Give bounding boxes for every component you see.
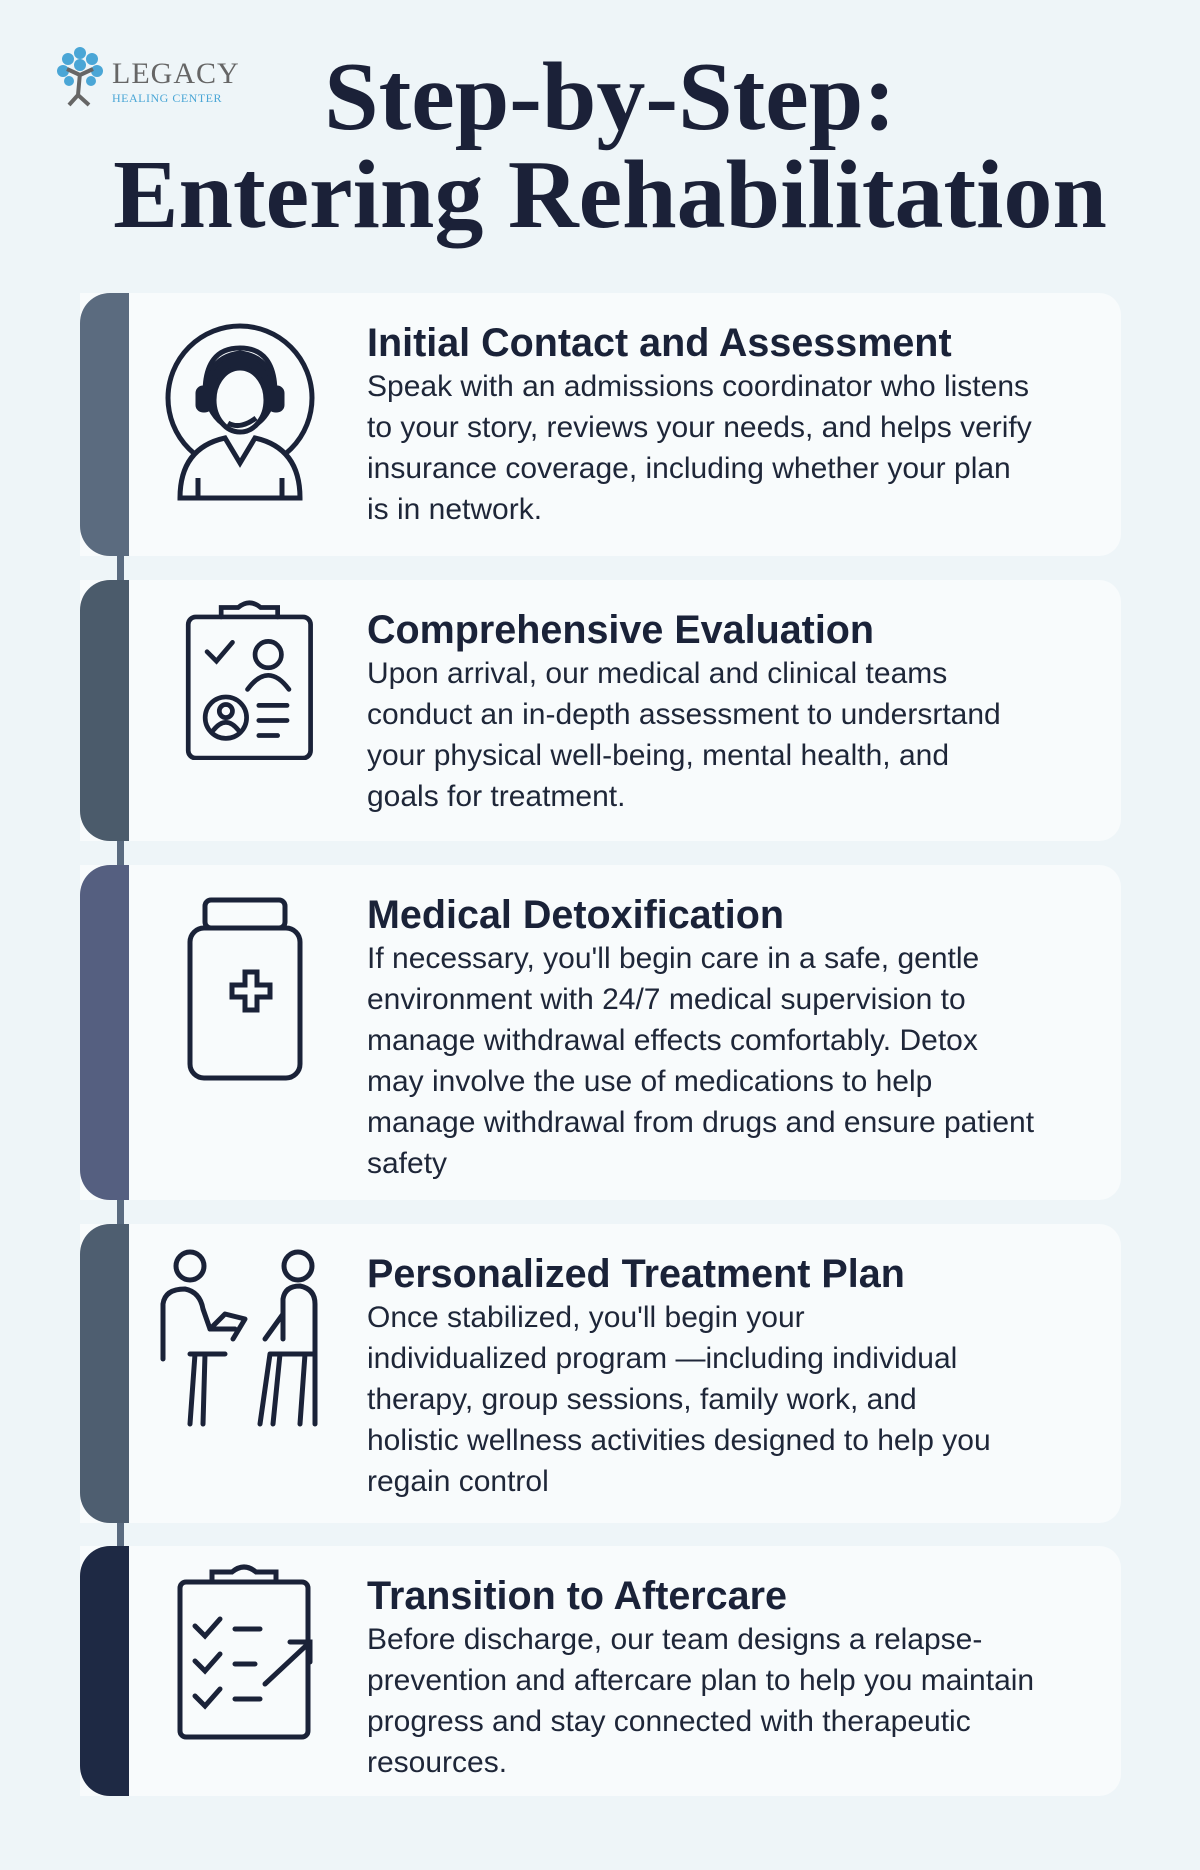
text: step 3: safety bbox=[367, 1147, 447, 1180]
text: step 4: Personalized Treatment Plan bbox=[367, 1252, 905, 1296]
text: step 3: may involve the use of medications to help bbox=[367, 1065, 932, 1098]
text: step 2 bbox=[367, 608, 1001, 813]
icon: clipboard evaluation bbox=[186, 600, 313, 760]
text: step 3: manage withdrawal from drugs and ensure patient bbox=[367, 1106, 1034, 1139]
panel: step 2 bbox=[80, 580, 1121, 841]
text: step 1 bbox=[367, 321, 1032, 526]
text: step 2: conduct an in-depth assessment to undersrtand bbox=[367, 698, 1001, 731]
text: step 3: If necessary, you'll begin care in a safe, gentle bbox=[367, 942, 979, 975]
text: step 5: Before discharge, our team designs a relapse- bbox=[367, 1623, 982, 1656]
icon: checklist clipboard bbox=[178, 1564, 312, 1740]
text: step 4: holistic wellness activities designed to help you bbox=[367, 1424, 991, 1457]
text: step 2: Comprehensive Evaluation bbox=[367, 608, 874, 652]
text: step 5: progress and stay connected with therapeutic bbox=[367, 1705, 971, 1738]
icon: medicine bottle bbox=[188, 898, 302, 1080]
text: step 4: regain control bbox=[367, 1465, 549, 1498]
text: step 4: therapy, group sessions, family work, and bbox=[367, 1383, 917, 1416]
panel: step 3 bbox=[80, 865, 1121, 1200]
icon: therapy session bbox=[160, 1250, 318, 1426]
text: step 1: to your story, reviews your needs, and helps verify bbox=[367, 411, 1032, 444]
text: step 5: Transition to Aftercare bbox=[367, 1574, 787, 1618]
text: step 5: resources. bbox=[367, 1746, 507, 1779]
title bbox=[113, 43, 1107, 249]
panel: step 4 bbox=[80, 1224, 1121, 1523]
panel: step 1 bbox=[80, 293, 1121, 556]
text: step 4: individualized program —including individual bbox=[367, 1342, 957, 1375]
text: step 1: is in network. bbox=[367, 493, 542, 526]
text: step 4: Once stabilized, you'll begin your bbox=[367, 1301, 805, 1334]
text: step 5 bbox=[367, 1574, 1034, 1779]
logo: HEALING CENTER bbox=[112, 91, 222, 105]
text: step 2: goals for treatment. bbox=[367, 780, 625, 813]
title: Entering Rehabilitation bbox=[113, 141, 1107, 249]
text: step 4 bbox=[367, 1252, 991, 1498]
panel: step 5 bbox=[80, 1546, 1121, 1796]
text: step 2: your physical well-being, mental health, and bbox=[367, 739, 949, 772]
text: step 3 bbox=[367, 893, 1034, 1180]
logo: LEGACY bbox=[112, 57, 240, 90]
text: step 1: insurance coverage, including whether your plan bbox=[367, 452, 1011, 485]
title: Step-by-Step: bbox=[324, 43, 896, 151]
text: step 1: Speak with an admissions coordinator who listens bbox=[367, 370, 1029, 403]
icon: admissions coordinator bbox=[166, 324, 314, 500]
text: step 2: Upon arrival, our medical and clinical teams bbox=[367, 657, 947, 690]
text: step 1: Initial Contact and Assessment bbox=[367, 321, 952, 365]
text: step 5: prevention and aftercare plan to help you maintain bbox=[367, 1664, 1034, 1697]
connector lines bbox=[117, 550, 124, 1230]
text: step 3: manage withdrawal effects comfortably. Detox bbox=[367, 1024, 978, 1057]
text: step 3: environment with 24/7 medical supervision to bbox=[367, 983, 966, 1016]
logo bbox=[57, 47, 240, 106]
text: step 3: Medical Detoxification bbox=[367, 893, 784, 937]
